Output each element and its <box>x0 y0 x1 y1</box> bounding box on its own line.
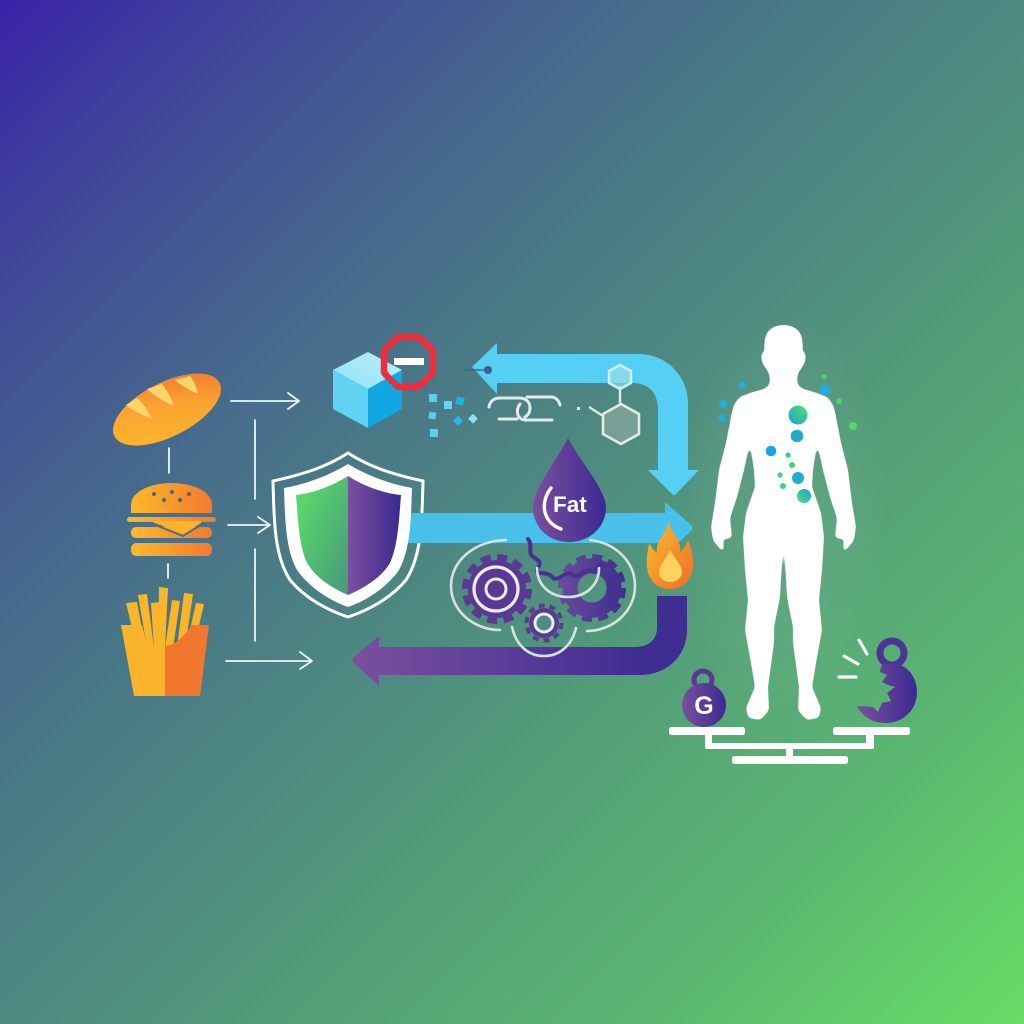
human silhouette <box>712 326 855 719</box>
icon: kettlebell G <box>682 671 726 727</box>
particles inside <box>766 406 811 503</box>
icon: fat drop <box>533 438 606 542</box>
particles right <box>820 374 857 430</box>
shield body <box>284 464 412 607</box>
arrow: blue top loop <box>472 343 699 495</box>
balance scale platform <box>669 727 910 764</box>
blue particles left <box>718 382 746 422</box>
icon: stop sign with minus <box>384 337 433 387</box>
icon: broken kettlebell <box>839 640 917 723</box>
icon: flame <box>647 521 693 589</box>
arrow: purple bottom loop <box>352 596 687 686</box>
icon: gears <box>451 539 635 656</box>
squiggle <box>528 539 605 579</box>
icon: bread loaf <box>102 359 232 460</box>
icon: french fries <box>121 587 209 696</box>
small connector dot <box>465 366 492 374</box>
particles around and inside body <box>718 374 857 503</box>
connector lines and arrows from foods <box>168 393 312 669</box>
white outlines <box>451 540 635 656</box>
icon: burger <box>127 483 216 556</box>
right gear <box>561 557 623 619</box>
left gear <box>465 557 529 621</box>
icon: broken chain link <box>482 397 560 420</box>
arrow: blue middle <box>405 502 692 555</box>
icon: cube <box>333 352 402 428</box>
icon: molecule <box>577 365 639 444</box>
particles <box>428 394 478 437</box>
icon: kettlebell G: G <box>694 692 714 720</box>
icon: fat drop: Fat <box>553 492 587 517</box>
small gear <box>526 606 562 640</box>
icon: shield outline <box>273 453 423 617</box>
body glow <box>679 305 889 735</box>
